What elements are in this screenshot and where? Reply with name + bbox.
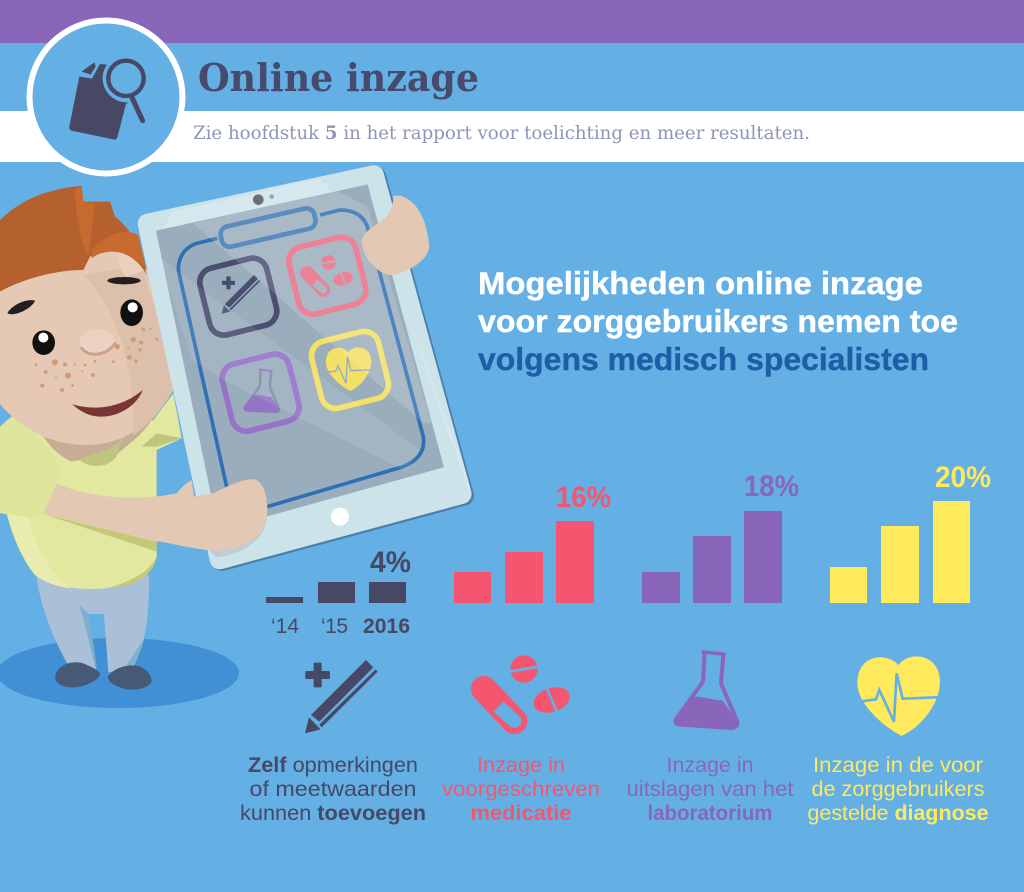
tablet frame [148,175,462,559]
headline: volgens medisch specialisten [478,341,929,377]
label: diagnosis [808,754,988,825]
subtitle white band [0,111,1024,162]
character with tablet [0,175,470,708]
hair [0,186,147,293]
label: own notes: of meetwaarden [250,778,416,801]
icon: heart with pulse [857,656,940,736]
eyebrows [107,277,141,284]
label: medication: medicatie [470,802,572,825]
label: medication [442,754,600,825]
eyes [120,299,143,326]
icon: flask [673,650,738,729]
label: laboratory: Inzage in [666,754,754,777]
freckles [35,328,159,392]
bar chart: laboratory [642,470,799,603]
label: own notes [240,754,426,825]
subtitle: Zie hoofdstuk 5 in het rapport voor toelichting en meer resultaten. [193,122,810,144]
tablet edge [150,177,464,561]
top purple band [0,0,1024,43]
headline: voor zorggebruikers nemen toe [478,303,958,339]
arm and hand [42,479,267,557]
headline [478,265,958,377]
label: laboratory [626,754,794,825]
legs and shoes [36,573,152,690]
tile: diagnosis [308,328,392,412]
label: medication: Inzage in [477,754,565,777]
camera [253,194,264,205]
bar chart: own notes: 4% [370,546,411,579]
tile: laboratory [219,351,302,434]
label: own notes: Zelf opmerkingen [248,754,418,777]
bar chart: laboratory: 18% [744,470,799,503]
label: medication: voorgeschreven [442,778,600,801]
icon: plus and pencil [305,660,378,733]
thumb [362,196,429,275]
screen [156,184,444,530]
tile: note [197,255,280,338]
ground shadow [0,638,239,708]
clipboard outline [178,210,424,507]
label: laboratory: laboratorium [648,802,772,825]
label: diagnosis: Inzage in de voor [813,754,983,777]
title: Online inzage [198,55,479,100]
label: own notes: kunnen toevoegen [240,802,426,825]
label: laboratory: uitslagen van het [626,778,794,801]
headline: Mogelijkheden online inzage [478,265,923,301]
label: diagnosis: de zorggebruikers [812,778,984,801]
home button [331,508,349,526]
year labels: 2016 [363,615,410,638]
year labels: ‘14 [271,615,299,638]
bar chart: own notes [266,546,411,603]
label: diagnosis: gestelde diagnose [808,802,988,825]
tablet [148,175,470,561]
icon: document with magnifier badge [30,20,182,174]
bar chart: diagnosis: 20% [935,461,991,494]
clipboard clip [219,207,317,248]
head [0,186,177,466]
screen reflections [193,191,432,423]
year labels [271,615,410,638]
shirt [0,393,182,589]
year labels: ‘15 [321,615,348,638]
mouth [72,390,143,417]
nose [80,329,115,354]
bar chart: diagnosis [830,461,991,603]
bar chart: medication [454,481,611,603]
tile: medication [286,234,369,317]
icon: pills [471,655,573,734]
bar chart: medication: 16% [556,481,611,514]
